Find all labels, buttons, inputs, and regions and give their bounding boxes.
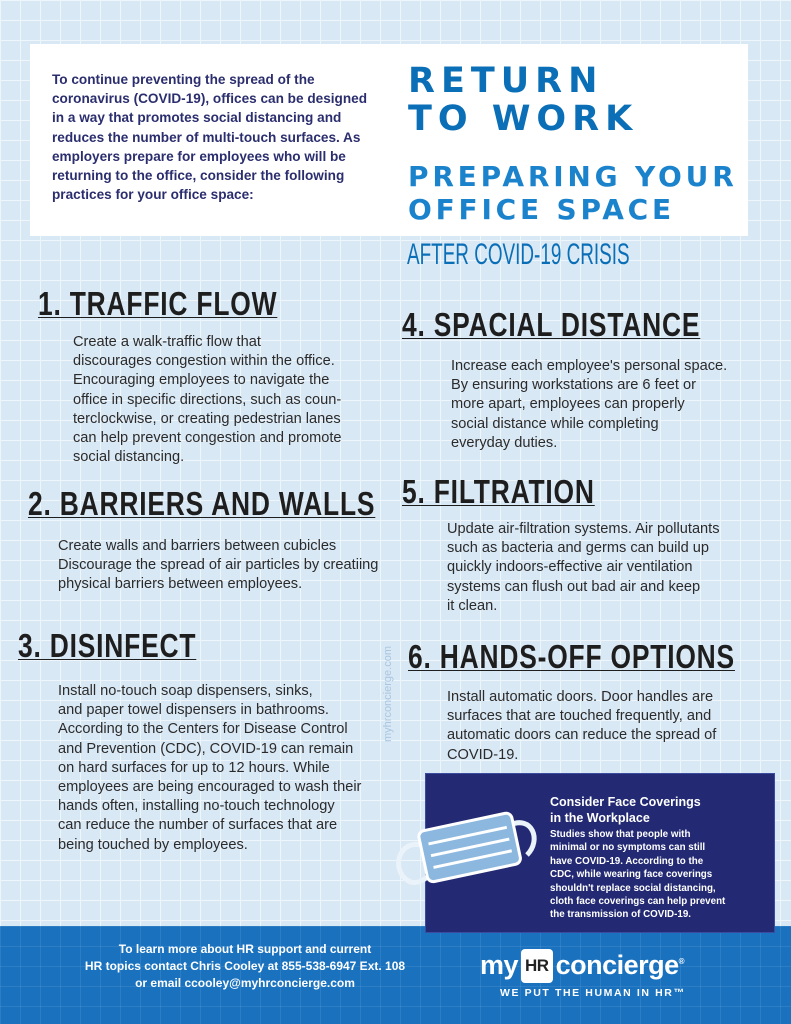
heading 6: 6. HANDS-OFF OPTIONS xyxy=(408,638,735,675)
callout: face coverings: Consider Face Coverings xyxy=(550,795,701,809)
body 2 xyxy=(58,538,378,592)
heading 1: 1. TRAFFIC FLOW xyxy=(38,285,277,322)
logo: WE PUT THE HUMAN IN HR™ xyxy=(500,987,686,999)
body 1 xyxy=(73,334,342,465)
body 6 xyxy=(447,689,716,763)
body 4 xyxy=(451,358,727,451)
callout: face coverings: minimal or no symptoms can still xyxy=(550,842,705,853)
body 1: can help prevent congestion and promote xyxy=(73,430,342,446)
subtitle: PREPARING YOUR xyxy=(408,160,738,193)
logo: my concierge® xyxy=(480,950,684,980)
body 1: office in specific directions, such as coun- xyxy=(73,392,341,408)
callout: face coverings: the transmission of COVID-19. xyxy=(550,909,691,920)
body 5: quickly indoors-effective air ventilation xyxy=(447,559,693,575)
subtitle xyxy=(408,160,738,226)
body 1: discourages congestion within the office. xyxy=(73,353,335,369)
body 2: Discourage the spread of air particles by creatiing xyxy=(58,557,378,573)
body 3: employees are being encouraged to wash their xyxy=(58,779,361,795)
subtitle: OFFICE SPACE xyxy=(408,193,675,226)
icon: face mask xyxy=(396,812,537,885)
callout: face coverings: cloth face coverings can help prevent xyxy=(550,896,725,907)
callout: face coverings: in the Workplace xyxy=(550,811,650,825)
callout: face coverings: Studies show that people with xyxy=(550,829,690,840)
body 5 xyxy=(447,521,720,614)
body 6: automatic doors can reduce the spread of xyxy=(447,727,716,743)
footer contact text: HR topics contact Chris Cooley at 855-538-6947 Ext. 108 xyxy=(85,959,405,973)
body 4: social distance while completing xyxy=(451,416,659,432)
title: TO WORK xyxy=(408,99,638,139)
body 3: According to the Centers for Disease Control xyxy=(58,721,348,737)
body 4: Increase each employee's personal space. xyxy=(451,358,727,374)
body 2: physical barriers between employees. xyxy=(58,576,302,592)
body 5: it clean. xyxy=(447,598,497,614)
subtitle: after covid: AFTER COVID-19 CRISIS xyxy=(407,238,630,271)
logo xyxy=(480,949,686,999)
body 3: on hard surfaces for up to 12 hours. While xyxy=(58,760,330,776)
body 5: systems can flush out bad air and keep xyxy=(447,579,700,595)
body 3: and Prevention (CDC), COVID-19 can remain xyxy=(58,741,353,757)
footer contact text xyxy=(85,942,405,990)
intro text: reduces the number of multi-touch surfaces. As xyxy=(52,130,360,145)
body 4: By ensuring workstations are 6 feet or xyxy=(451,377,696,393)
logo: HR xyxy=(525,956,549,975)
callout: face coverings: shouldn't replace social distancing, xyxy=(550,883,716,894)
callout: face coverings xyxy=(425,773,775,933)
body 1: Encouraging employees to navigate the xyxy=(73,372,329,388)
body 4: everyday duties. xyxy=(451,435,557,451)
intro text: in a way that promotes social distancing and xyxy=(52,110,341,125)
watermark: myhrconcierge.com xyxy=(382,646,394,742)
body 3 xyxy=(58,683,362,853)
footer contact text: To learn more about HR support and current xyxy=(119,942,371,956)
body 1: Create a walk-traffic flow that xyxy=(73,334,261,350)
title xyxy=(408,61,638,139)
intro text xyxy=(52,72,367,202)
title: RETURN xyxy=(408,61,603,101)
footer contact text: or email ccooley@myhrconcierge.com xyxy=(135,976,355,990)
body 1: social distancing. xyxy=(73,449,184,465)
body 3: and paper towel dispensers in bathrooms. xyxy=(58,702,329,718)
body 4: more apart, employees can properly xyxy=(451,396,685,412)
body 5: such as bacteria and germs can build up xyxy=(447,540,709,556)
intro text: To continue preventing the spread of the xyxy=(52,72,315,87)
body 6: Install automatic doors. Door handles are xyxy=(447,689,713,705)
body 1: terclockwise, or creating pedestrian lanes xyxy=(73,411,341,427)
intro text: practices for your office space: xyxy=(52,187,254,202)
body 5: Update air-filtration systems. Air pollutants xyxy=(447,521,720,537)
heading 3: 3. DISINFECT xyxy=(18,627,196,664)
intro text: coronavirus (COVID-19), offices can be designed xyxy=(52,91,367,106)
intro text: employers prepare for employees who will be xyxy=(52,149,346,164)
heading 5: 5. FILTRATION xyxy=(402,473,595,510)
intro text: returning to the office, consider the following xyxy=(52,168,344,183)
body 2: Create walls and barriers between cubicles xyxy=(58,538,336,554)
callout: face coverings: have COVID-19. According to the xyxy=(550,856,703,867)
body 3: being touched by employees. xyxy=(58,837,248,853)
callout: face coverings: CDC, while wearing face coverings xyxy=(550,869,712,880)
heading 2: 2. BARRIERS AND WALLS xyxy=(28,485,375,522)
body 6: surfaces that are touched frequently, and xyxy=(447,708,711,724)
body 6: COVID-19. xyxy=(447,747,518,763)
footer band xyxy=(0,926,791,1024)
header white panel xyxy=(30,44,748,236)
body 3: can reduce the number of surfaces that are xyxy=(58,817,337,833)
heading 4: 4. SPACIAL DISTANCE xyxy=(402,306,700,343)
body 3: Install no-touch soap dispensers, sinks, xyxy=(58,683,313,699)
body 3: hands often, installing no-touch technology xyxy=(58,798,335,814)
